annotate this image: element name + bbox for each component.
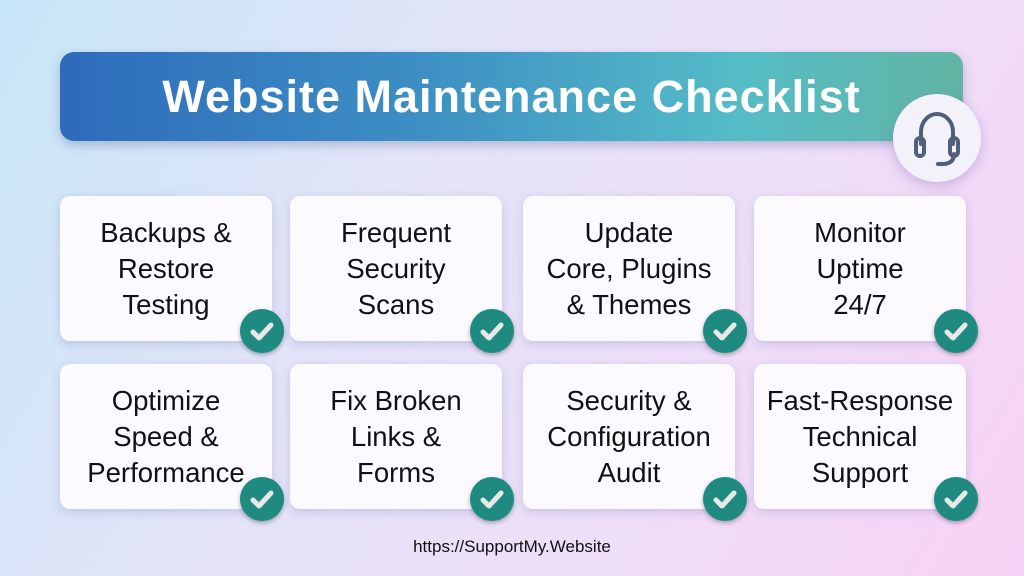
card: uptime: Uptime: [816, 253, 904, 284]
card: uptime: Monitor: [814, 217, 906, 248]
card: security scans: [290, 196, 502, 341]
card: speed: Speed &: [113, 421, 219, 452]
card: updates: Core, Plugins: [546, 253, 712, 284]
card: support: Fast-Response: [767, 385, 953, 416]
card: audit: Audit: [598, 457, 660, 488]
card: audit: Configuration: [547, 421, 711, 452]
title bar: Website Maintenance Checklist: [162, 71, 861, 122]
card: uptime: 24/7: [833, 289, 887, 320]
card: security scans: Security: [346, 253, 446, 284]
card: security scans: Frequent: [341, 217, 451, 248]
card: uptime: [754, 196, 966, 341]
card: speed: Performance: [87, 457, 245, 488]
card: backups: Restore: [118, 253, 214, 284]
card: broken links: [290, 364, 502, 509]
card: updates: & Themes: [567, 289, 691, 320]
card: security scans: Scans: [358, 289, 434, 320]
card: support: Technical: [803, 421, 917, 452]
footer url: https://SupportMy.Website: [413, 537, 611, 556]
card: speed: [60, 364, 272, 509]
card: speed: Optimize: [112, 385, 220, 416]
card: updates: Update: [585, 217, 673, 248]
card: audit: [523, 364, 735, 509]
card: backups: Backups &: [100, 217, 232, 248]
title bar: [60, 52, 963, 141]
card: audit: Security &: [566, 385, 692, 416]
card: backups: Testing: [122, 289, 210, 320]
icon: headset: [893, 94, 981, 182]
card: broken links: Links &: [351, 421, 441, 452]
card: broken links: Fix Broken: [330, 385, 462, 416]
card: broken links: Forms: [357, 457, 435, 488]
card: support: Support: [812, 457, 908, 488]
card: updates: [523, 196, 735, 341]
card: backups: [60, 196, 272, 341]
card: support: [754, 364, 966, 509]
